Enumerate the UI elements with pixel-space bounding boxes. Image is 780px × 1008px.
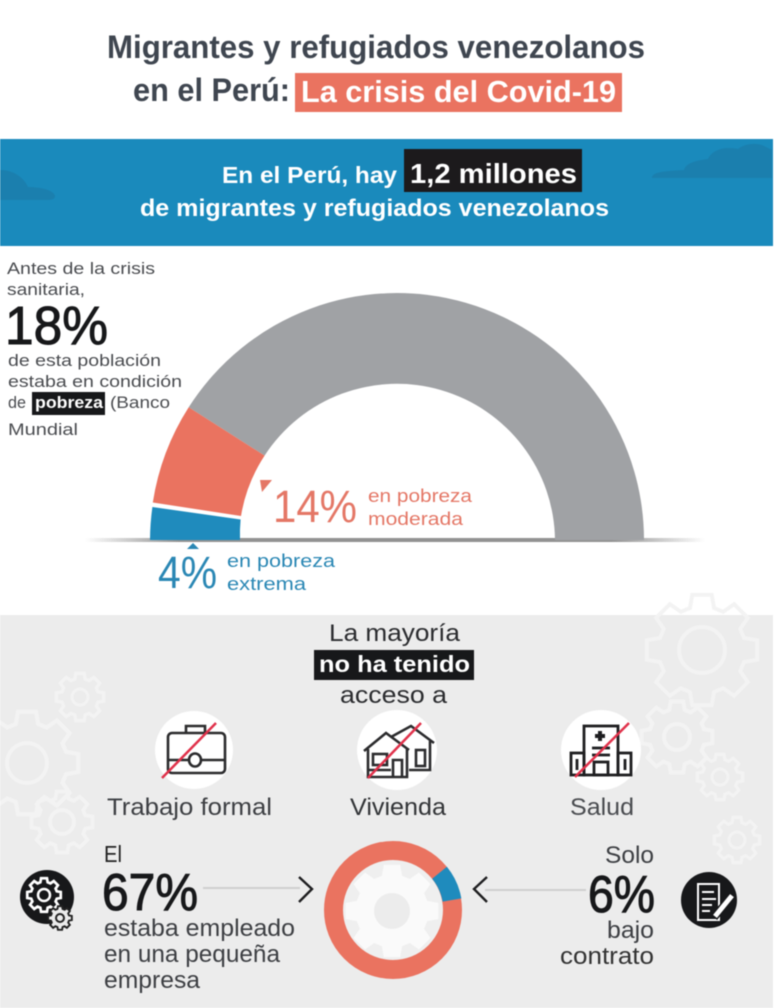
icon: right cloud (652, 144, 772, 178)
icon: left cloud (0, 170, 55, 200)
banner text: 1,2 millones (410, 158, 577, 189)
icon: hospital crossed out (561, 710, 641, 790)
text block: 6%: bajo (607, 917, 654, 944)
label: Salud: Salud (570, 794, 634, 821)
text block: 6%: contrato (560, 943, 654, 970)
label: 4% extreme poverty: 4% (158, 547, 217, 598)
title: en el Perú: (133, 72, 290, 108)
heading: access (314, 620, 474, 709)
text block: 67% (102, 841, 295, 994)
text block: 18% poverty: (Banco (110, 393, 170, 412)
text block: 67%: El (104, 841, 122, 867)
chart: employment donut (334, 850, 452, 970)
label: 14% moderate poverty: en pobreza (368, 486, 473, 506)
heading: access: no ha tenido (319, 651, 470, 677)
text block: 18% poverty: de (8, 393, 26, 412)
text block: 18% poverty: pobreza (35, 393, 104, 412)
heading: access: La mayoría (329, 620, 461, 647)
chart: poverty semi-donut (85, 293, 705, 542)
panel: blue banner (0, 139, 773, 246)
banner text (140, 149, 609, 222)
panel: access section (0, 595, 773, 1008)
label: Vivienda: Vivienda (350, 794, 447, 821)
label: 14% moderate poverty (260, 480, 473, 532)
icon: briefcase crossed out (155, 711, 233, 789)
text block: 18% poverty: estaba en condición (8, 372, 182, 391)
icon: contract badge (681, 872, 737, 928)
icon: gears badge (20, 870, 74, 930)
text block: 18% poverty (5, 259, 182, 439)
label: 4% extreme poverty (158, 543, 336, 598)
text block: 67%: estaba empleado (104, 915, 295, 942)
text block: 18% poverty: de esta población (8, 351, 161, 370)
label: 14% moderate poverty: 14% (273, 481, 357, 532)
text block: 67%: 67% (102, 864, 198, 922)
label: 4% extreme poverty: en pobreza (227, 551, 336, 571)
banner text: En el Perú, hay (222, 162, 397, 188)
arrow: right (203, 877, 312, 902)
label: 14% moderate poverty: moderada (368, 509, 464, 529)
text block: 18% poverty: Antes de la crisis (7, 259, 155, 278)
text block: 18% poverty: sanitaria, (7, 280, 85, 299)
arrow: left (474, 877, 586, 902)
text block: 67%: en una pequeña (104, 941, 281, 968)
heading: access: acceso a (340, 682, 448, 709)
label: 4% extreme poverty: extrema (227, 574, 307, 594)
text block: 6%: 6% (588, 866, 655, 924)
title: Migrantes y refugiados venezolanos (107, 29, 645, 65)
title (107, 29, 645, 112)
title: La crisis del Covid-19 (301, 74, 616, 109)
text block: 6%: Solo (605, 842, 654, 869)
text block: 18% poverty: 18% (5, 296, 108, 356)
label: Trabajo formal: Trabajo formal (107, 794, 272, 821)
banner text: de migrantes y refugiados venezolanos (140, 195, 609, 222)
text block: 67%: empresa (104, 967, 201, 994)
text block: 6% (560, 842, 655, 970)
background gears (0, 595, 760, 863)
text block: 18% poverty: Mundial (8, 420, 78, 439)
icon: houses crossed out (357, 710, 437, 790)
